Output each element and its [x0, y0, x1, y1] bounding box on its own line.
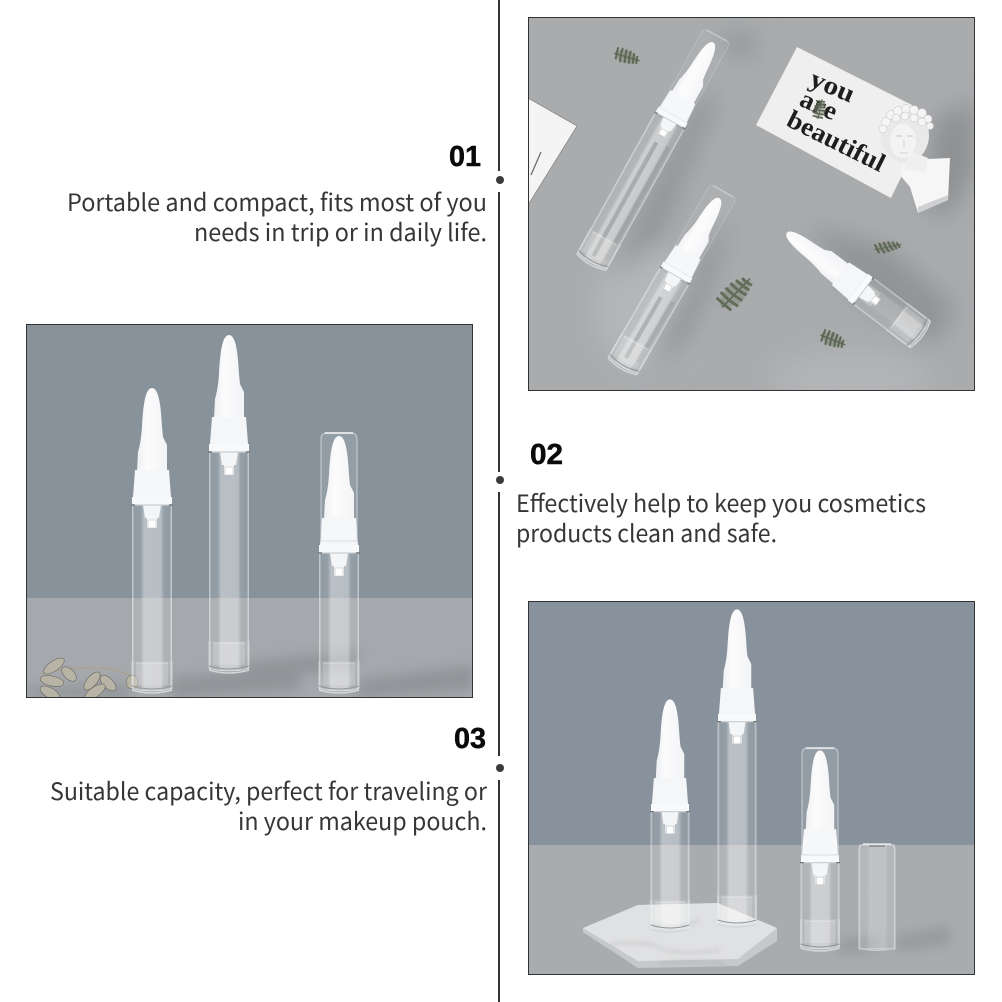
timeline dot 02: [496, 476, 504, 484]
marble block: [583, 903, 777, 968]
leaf 2: [716, 277, 753, 312]
card: you are beautiful: you: [806, 64, 859, 108]
bottle: right with cap: [318, 433, 360, 693]
bottle: left: [131, 388, 173, 693]
card: you are beautiful: are: [796, 84, 842, 126]
leaf 4: [820, 328, 846, 348]
photo panel: bottles on marble: [528, 601, 975, 975]
number 03: 03: [454, 723, 486, 755]
leaf 3: [874, 241, 901, 253]
bottle: short with cap: [606, 183, 739, 377]
dried plant sprig: [40, 658, 138, 697]
panel 1 border: [528, 18, 974, 390]
photo panel: flat lay of bottles: [528, 17, 975, 410]
text block 03: Suitable capacity, perfect for traveling or: [50, 772, 488, 807]
timeline dot 03: [496, 764, 504, 772]
text block 03: [50, 772, 488, 837]
bust statue: [879, 104, 950, 213]
bottle: center tall: [208, 335, 250, 673]
text block 01: Portable and compact, fits most of you: [67, 183, 487, 218]
text block 02: Effectively help to keep you cosmetics: [516, 484, 926, 519]
text block 01: needs in trip or in daily life.: [194, 213, 487, 248]
bottle: tall on marble: [717, 609, 757, 927]
card: you are beautiful: beautiful: [782, 104, 890, 178]
bottle: long with cap: [575, 27, 732, 273]
text block 03: in your makeup pouch.: [238, 802, 487, 837]
number 02: 02: [530, 439, 563, 471]
text block 02: products clean and safe.: [516, 514, 777, 549]
bottle: uncapped lying: [786, 232, 931, 348]
photo panel: three bottles standing: [26, 324, 473, 703]
icon: leaf on card: [812, 99, 826, 120]
loose cap: [859, 844, 895, 950]
leaf 1: [614, 47, 640, 64]
number 01: 01: [449, 141, 481, 173]
bottle: with cap: [800, 748, 840, 951]
text block 02: [516, 484, 926, 549]
panel 2 border: [26, 324, 472, 698]
panel 3 border: [528, 602, 974, 974]
timeline dot 01: [496, 176, 504, 184]
card: you are beautiful: [756, 47, 912, 198]
text block 01: [67, 183, 487, 248]
timeline: [496, 0, 504, 1002]
bottle: short on marble: [650, 699, 690, 932]
card: small white card: [528, 98, 577, 205]
